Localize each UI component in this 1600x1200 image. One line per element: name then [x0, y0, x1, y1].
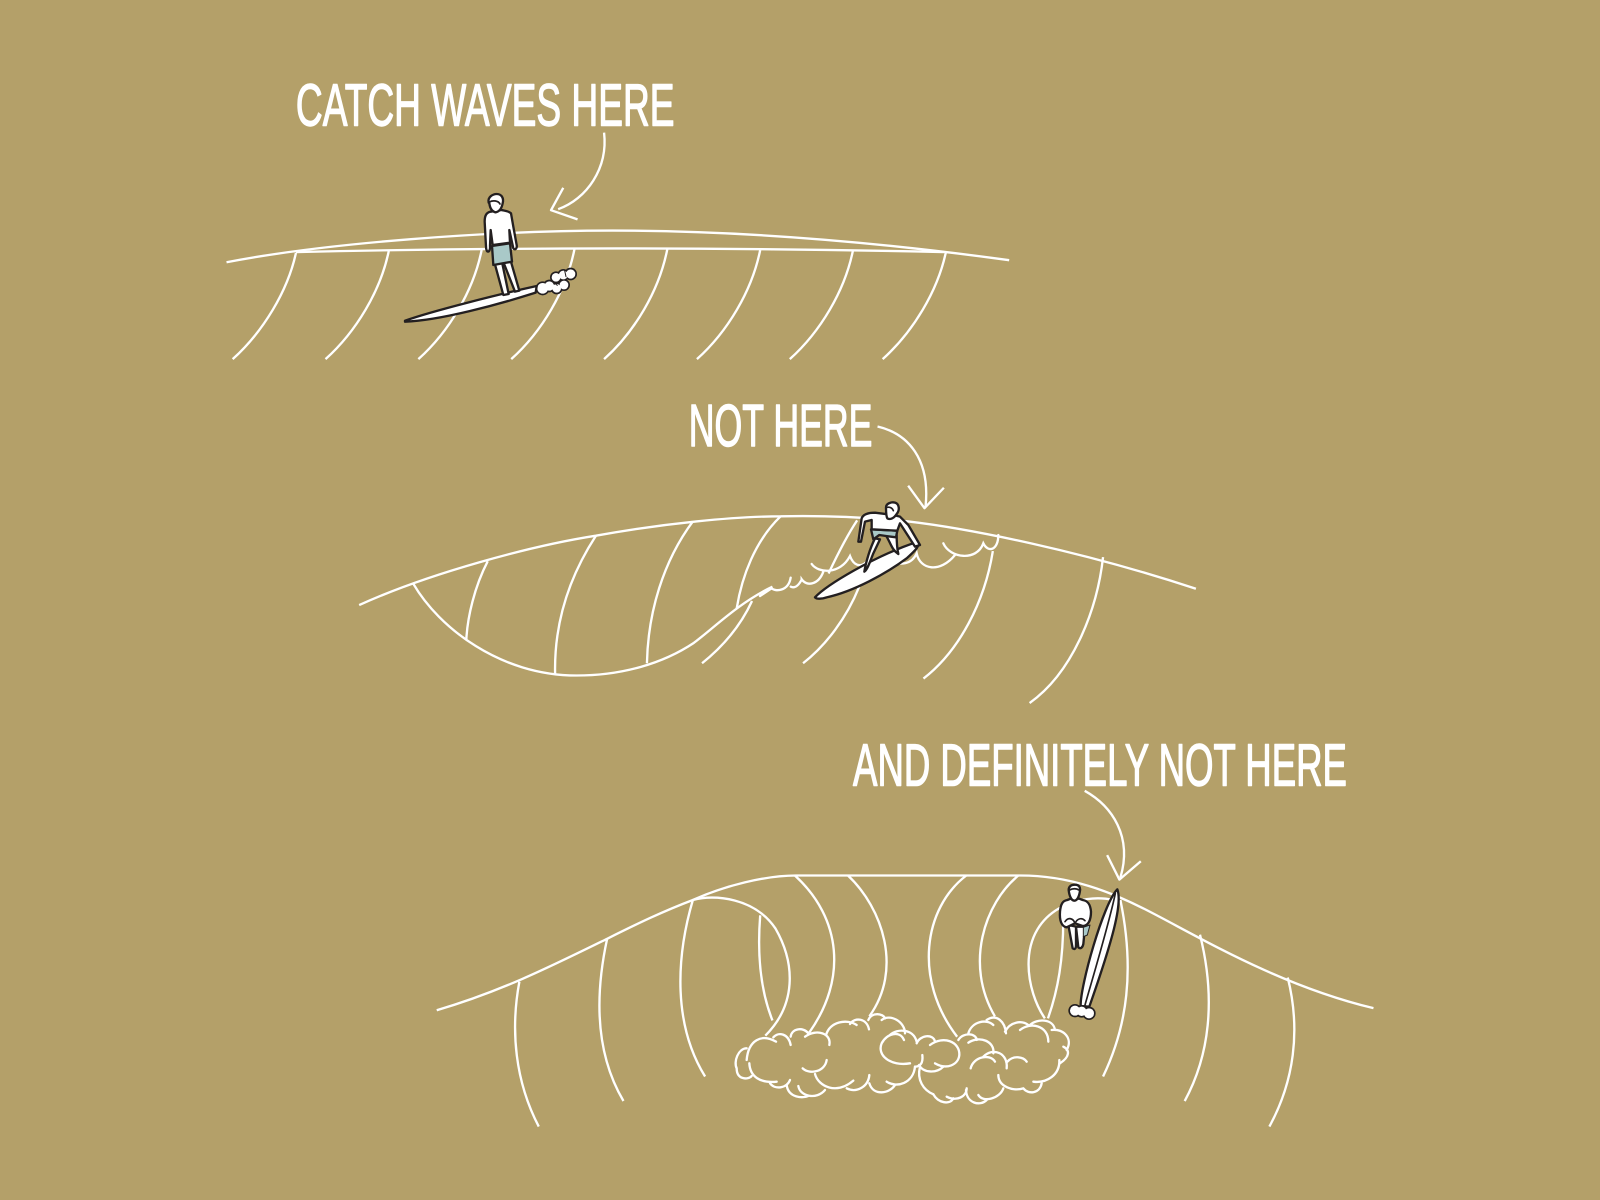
whitewater scallops	[760, 535, 998, 596]
arrow: to shoulder of wave	[551, 133, 605, 219]
wave 1 lines	[227, 231, 1009, 359]
heading: catch waves here: CATCH WAVES HERE	[296, 72, 674, 139]
longboard	[405, 286, 537, 322]
legs	[1068, 925, 1076, 949]
icon: surfer standing on longboard	[405, 194, 577, 322]
surfboard	[815, 542, 918, 599]
head	[1069, 885, 1080, 901]
section: steep peeling wave	[359, 392, 1196, 703]
torso and arms	[1060, 899, 1091, 927]
foam at tail	[1068, 1004, 1096, 1020]
legs	[495, 262, 509, 295]
heading: not here: NOT HERE	[689, 392, 872, 459]
whitewater cloud	[736, 1014, 1069, 1103]
section: gentle wave	[227, 72, 1009, 359]
section: closing-out wave	[437, 732, 1373, 1127]
icon: surfer sitting beside upright longboard	[1060, 885, 1119, 1020]
arrow: to closeout crest	[1085, 791, 1141, 880]
torso and arms	[858, 513, 920, 547]
head	[488, 194, 503, 212]
shorts sliver	[1083, 925, 1090, 937]
wave 3 lines	[437, 876, 1373, 1127]
arrow: to breaking crest	[878, 427, 944, 508]
torso and arms	[485, 210, 517, 252]
longboard with stringer	[1081, 889, 1119, 1007]
icon: surfer crouching on board with whitewater scallops	[760, 502, 998, 599]
foam trail	[536, 268, 577, 295]
head	[886, 502, 899, 519]
legs	[864, 538, 880, 572]
shorts	[871, 529, 897, 539]
wave 2 lines	[359, 516, 1196, 703]
shorts	[492, 243, 512, 265]
